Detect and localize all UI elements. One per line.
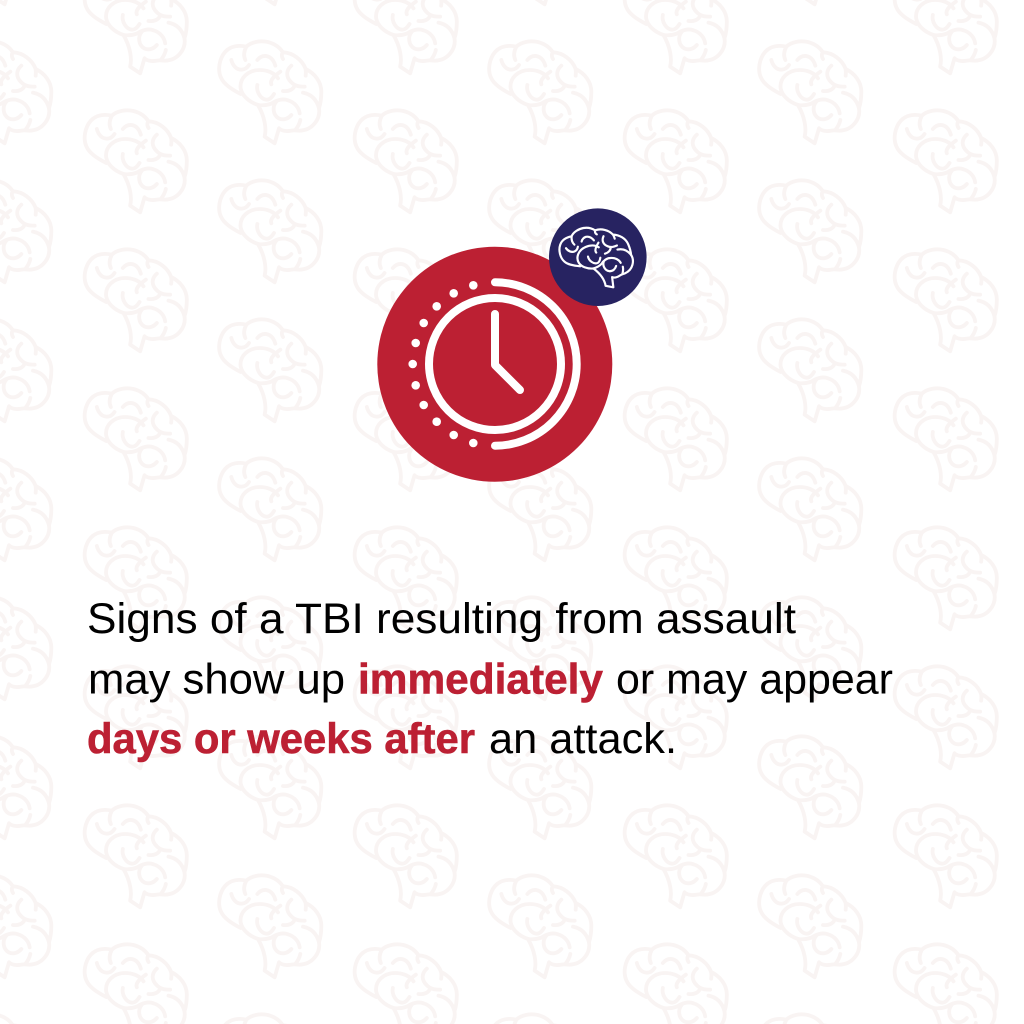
red circle xyxy=(377,247,612,482)
line 1: Signs of a TBI resulting from assault xyxy=(87,595,796,643)
white brain xyxy=(554,214,641,301)
line 2: may show up xyxy=(88,656,345,704)
text block: TBI signs statement xyxy=(87,595,893,763)
outer progress arc xyxy=(495,282,577,446)
line 3: days or weeks after xyxy=(87,715,475,763)
line 2: or may appear xyxy=(616,656,893,704)
line 2: immediately xyxy=(358,656,603,704)
dotted progress arc xyxy=(408,281,478,447)
icon: navy brain badge xyxy=(549,208,647,306)
line 3: an attack. xyxy=(489,715,677,763)
line 3 xyxy=(87,715,677,763)
line 2 xyxy=(88,656,893,704)
clock face ring xyxy=(429,298,561,430)
navy circle xyxy=(549,208,647,306)
clock hands xyxy=(495,314,520,390)
icon: red clock badge xyxy=(377,247,612,482)
